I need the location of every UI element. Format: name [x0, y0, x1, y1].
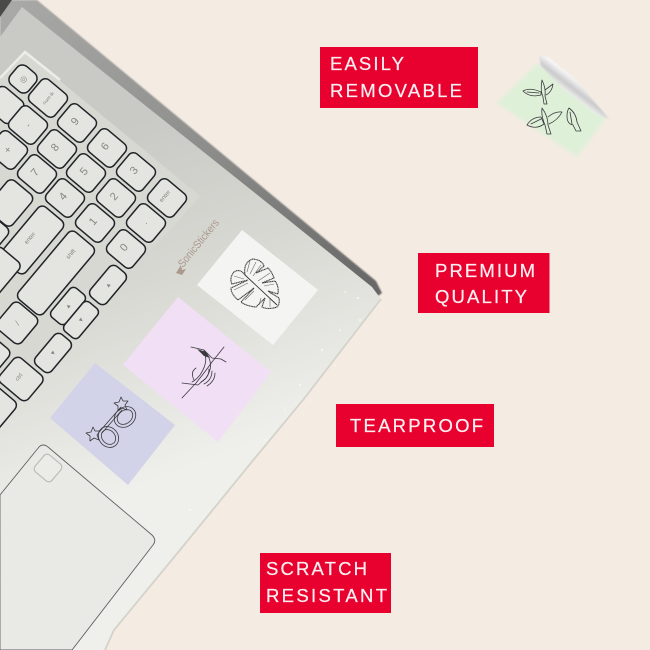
sticker: lavender glasses — [50, 363, 175, 485]
label: premium quality — [418, 253, 550, 313]
main keys: ▲ — [105, 281, 113, 290]
brand logo on laptop: SonicStickers — [176, 217, 222, 270]
laptop — [0, 0, 382, 650]
main keys: enter — [24, 232, 37, 246]
label: scratch resistant — [260, 553, 391, 613]
keyboard keys — [0, 62, 189, 432]
lower edge strip — [105, 299, 381, 650]
number pad keys: 7 — [29, 167, 42, 179]
laptop body — [0, 7, 381, 650]
label: scratch resistant: SCRATCH — [266, 558, 367, 579]
power key: ◎ — [18, 74, 29, 85]
laptop corner shadow — [0, 0, 12, 17]
laptop dark hinge edge — [0, 0, 382, 296]
number pad keys: 0 — [118, 242, 131, 254]
sticker: pink bird on branch — [123, 297, 271, 442]
main keys: shift — [66, 248, 77, 261]
label: tearproof: TEARPROOF — [350, 415, 483, 436]
number pad keys: 6 — [99, 141, 112, 153]
number pad keys: 4 — [57, 191, 70, 203]
trackpad — [0, 445, 155, 650]
number pad keys: 8 — [49, 142, 62, 154]
number pad keys: 2 — [108, 191, 121, 203]
keyboard well — [0, 52, 200, 425]
label: easily removable: EASILY — [330, 53, 404, 74]
icon: monstera leaf — [231, 259, 279, 308]
number pad keys: num lk — [42, 91, 56, 106]
icon: three birds — [523, 80, 581, 134]
sticker: white monstera — [197, 230, 318, 345]
label: premium quality: QUALITY — [435, 286, 527, 307]
label: easily removable — [320, 47, 478, 108]
icon: bird on branch — [182, 347, 226, 398]
surface speckles — [189, 291, 361, 511]
main keys: ▲ — [65, 302, 73, 311]
keyboard well highlight — [0, 52, 60, 80]
main keys: / — [13, 319, 22, 327]
label: tearproof — [336, 404, 494, 447]
number pad keys — [0, 76, 189, 271]
main keys: ▼ — [78, 316, 86, 325]
main keys: ctrl — [15, 373, 24, 383]
number pad keys: - — [23, 121, 33, 129]
icon: star glasses — [86, 397, 140, 452]
number pad keys: . — [140, 218, 149, 226]
number pad keys: + — [2, 144, 15, 156]
number pad keys: enter — [159, 190, 172, 204]
power key — [6, 62, 40, 96]
number pad keys: 9 — [69, 116, 82, 128]
label: easily removable: REMOVABLE — [330, 80, 462, 101]
number pad keys: 3 — [128, 165, 141, 177]
main keys — [0, 177, 129, 432]
label: premium quality: PREMIUM — [435, 260, 535, 281]
number pad keys: 5 — [78, 166, 91, 178]
number pad keys: 1 — [87, 216, 100, 228]
main keys: ▼ — [50, 349, 58, 358]
fingerprint reader — [33, 453, 63, 483]
label: scratch resistant: RESISTANT — [266, 585, 387, 606]
sticker: green peeling birds — [497, 56, 609, 157]
peeling corner curl — [539, 56, 609, 119]
